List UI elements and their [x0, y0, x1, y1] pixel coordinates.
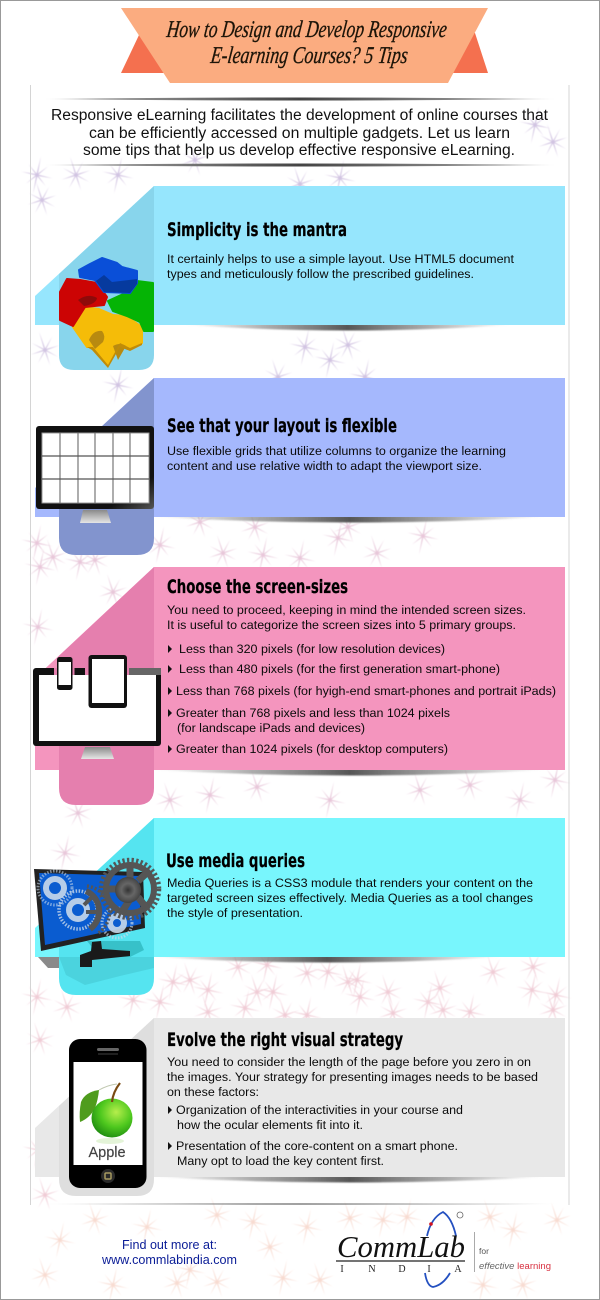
body text: You need to consider the length of the page before you zero in on [167, 1055, 531, 1069]
body text: the style of presentation. [167, 906, 303, 920]
logo: CommLab India: effective learning [479, 1261, 551, 1271]
apple [80, 1083, 132, 1144]
title: E-learning Courses? 5 Tips [209, 43, 409, 69]
body text [167, 876, 533, 920]
body text: Organization of the interactivities in your course and [176, 1103, 463, 1117]
body text: Less than 480 pixels (for the first generation smart-phone) [179, 662, 500, 676]
panel: screen sizes [33, 567, 565, 805]
footer call to action: Find out more at: [122, 1237, 217, 1252]
title [165, 17, 449, 69]
panel: simplicity [35, 186, 565, 370]
icon: monitor with gears [34, 860, 159, 985]
body text: Less than 768 pixels (for hyigh-end smart-phones and portrait iPads) [176, 684, 556, 698]
body text: Presentation of the core-content on a smart phone. [176, 1139, 458, 1153]
footer call to action [101, 1237, 237, 1267]
body text: the images. Your strategy for presenting images needs to be based [167, 1070, 538, 1084]
intro text block: Responsive eLearning facilitates the development of online courses that [51, 107, 549, 124]
logo: CommLab India: CommLab [337, 1229, 465, 1264]
title banner [121, 8, 488, 83]
heading: Use media queries [166, 850, 305, 872]
body text: Many opt to load the key content first. [177, 1154, 384, 1168]
panel: visual strategy [35, 1018, 565, 1196]
icon: puzzle pieces [60, 258, 153, 368]
title: How to Design and Develop Responsive [165, 17, 449, 43]
intro text block: can be efficiently accessed on multiple gadgets. Let us learn [89, 125, 510, 142]
body text: Use flexible grids that utilize columns to organize the learning [167, 444, 506, 458]
heading: Choose the screen-sizes [167, 576, 348, 598]
icon: smartphone with apple [69, 1039, 146, 1188]
logo: CommLab India: I [340, 1264, 344, 1275]
body text: content and use relative width to adapt the viewport size. [167, 459, 482, 473]
heading: Simplicity is the mantra [167, 219, 347, 241]
heading: Evolve the right visual strategy [167, 1029, 403, 1051]
body text [167, 603, 556, 756]
panel: media queries [34, 818, 565, 995]
icon: monitor with grid [36, 426, 154, 523]
panel: flexible layout [35, 378, 565, 555]
intro text block: some tips that help us develop effective responsive eLearning. [83, 142, 515, 159]
apple label: Apple [88, 1145, 126, 1161]
body text [167, 444, 506, 473]
body text: It is useful to categorize the screen sizes into 5 primary groups. [167, 618, 516, 632]
body text [167, 1055, 538, 1168]
footer call to action: www.commlabindia.com [101, 1252, 237, 1267]
body text: Media Queries is a CSS3 module that renders your content on the [167, 876, 533, 890]
body text: targeted screen sizes effectively. Media Queries as a tool changes [167, 891, 533, 905]
logo: CommLab India: N [368, 1264, 376, 1275]
inner panel frame [30, 85, 569, 1205]
logo: CommLab India: D [398, 1264, 406, 1275]
body text: how the ocular elements fit into it. [177, 1118, 363, 1132]
body text: (for landscape iPads and devices) [177, 721, 365, 735]
body text: You need to proceed, keeping in mind the intended screen sizes. [167, 603, 526, 617]
logo: CommLab India: A [454, 1264, 462, 1275]
heading: See that your layout is flexible [167, 415, 397, 437]
body text: It certainly helps to use a simple layout. Use HTML5 document [167, 252, 515, 266]
body text [167, 252, 515, 281]
body text: Greater than 768 pixels and less than 1024 pixels [176, 706, 450, 720]
body text: Greater than 1024 pixels (for desktop computers) [176, 742, 448, 756]
body text: types and meticulously follow the prescribed guidelines. [167, 267, 474, 281]
icon: monitor, phone and tablet [33, 655, 161, 759]
logo: CommLab India: I [427, 1264, 431, 1275]
intro text block [42, 98, 558, 166]
bottom divider [42, 1203, 558, 1205]
logo: CommLab India: for [479, 1246, 489, 1256]
logo: CommLab India [336, 1212, 551, 1287]
body text: on these factors: [167, 1085, 259, 1099]
body text: Less than 320 pixels (for low resolution devices) [179, 642, 445, 656]
